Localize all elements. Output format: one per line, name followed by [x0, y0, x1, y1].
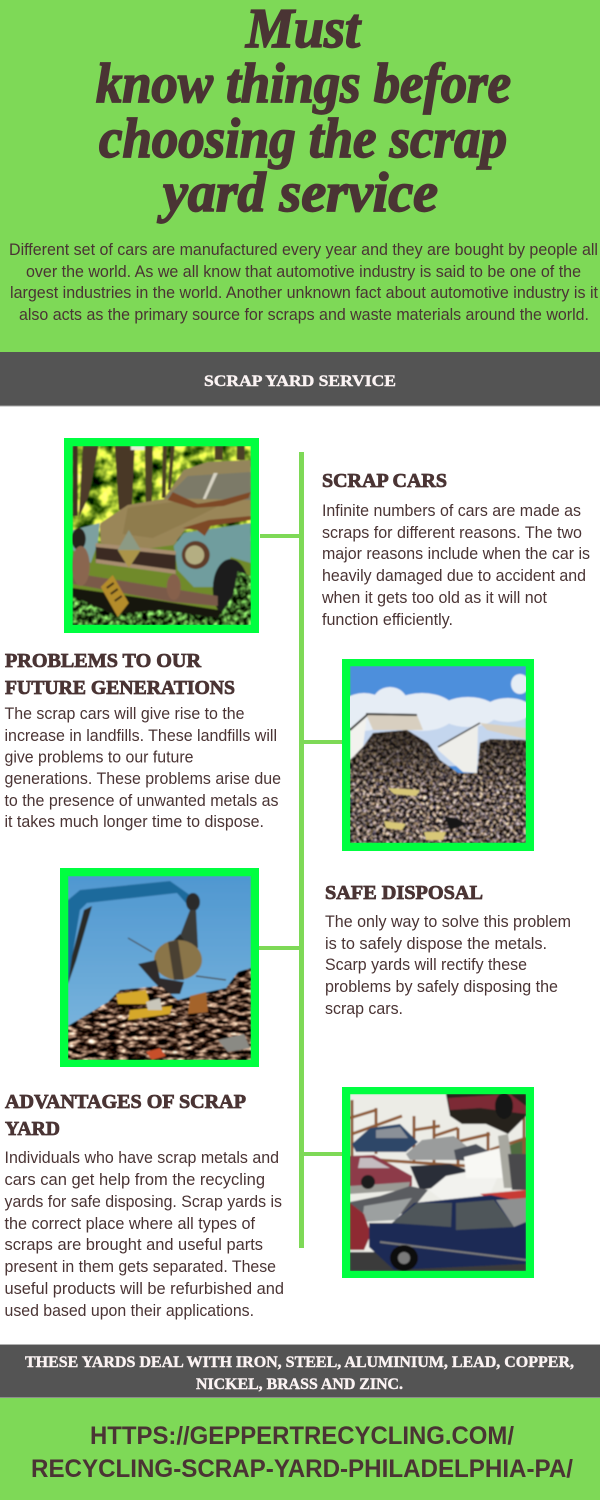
text: advantages: [4, 1149, 284, 1320]
heading: problems: PROBLEMS TO OUR: [5, 650, 201, 672]
footer: website url: HTTPS://GEPPERTRECYCLING.COM/: [90, 1422, 514, 1450]
text: problems: increase in landfills. These landfills will: [4, 727, 277, 745]
text: problems: to the presence of unwanted metals as: [4, 792, 278, 810]
text: problems: give problems to our future: [4, 748, 194, 766]
title: know things before: [96, 53, 511, 115]
timeline connector: [259, 452, 342, 1248]
intro paragraph: [9, 241, 598, 324]
text: advantages: useful products will be refurbished and: [4, 1280, 284, 1298]
text: scrap cars: heavily damaged due to accident and: [322, 567, 586, 585]
heading: safe disposal: SAFE DISPOSAL: [325, 882, 483, 904]
section banner: scrap yard service: [0, 352, 600, 406]
text: safe disposal: [325, 913, 571, 1018]
text: advantages: yards for safe disposing. Scrap yards is: [4, 1193, 282, 1211]
section: safe disposal: [325, 882, 571, 1018]
heading: problems: [5, 650, 235, 699]
intro paragraph: Different set of cars are manufactured every year and they are bought by people all: [9, 241, 598, 259]
intro paragraph: largest industries in the world. Another unknown fact about automotive industry is it: [10, 284, 598, 302]
section: advantages of scrap yard: [4, 1091, 284, 1320]
text: advantages: cars can get help from the recycling: [4, 1171, 265, 1189]
text: problems: it takes much longer time to dispose.: [4, 813, 264, 831]
banner: metals list: THESE YARDS DEAL WITH IRON, STEEL, ALUMINIUM, LEAD, COPPER,: [25, 1354, 574, 1371]
photo: landfill with dumping trailers: [338, 659, 534, 851]
text: safe disposal: scrap cars.: [325, 1000, 403, 1018]
section: problems to our future generations: [4, 650, 281, 831]
header panel: [0, 0, 600, 352]
section: scrap cars: [321, 470, 590, 629]
photo: crane grabbing scrap metal: [60, 868, 259, 1067]
intro paragraph: also acts as the primary source for scraps and waste materials around the world.: [19, 306, 589, 324]
title: [96, 0, 511, 224]
text: scrap cars: function efficiently.: [322, 611, 453, 629]
banner: metals list: [0, 1344, 600, 1398]
text: scrap cars: Infinite numbers of cars are made as: [322, 502, 581, 520]
intro paragraph: over the world. As we all know that automotive industry is said to be one of the: [26, 263, 581, 281]
text: advantages: present in them gets separated. These: [4, 1258, 276, 1276]
heading: advantages: [5, 1091, 246, 1140]
title: choosing the scrap: [99, 108, 507, 170]
title: yard service: [157, 162, 438, 224]
photo: stacked scrap cars on racks: [342, 1087, 534, 1278]
heading: problems: FUTURE GENERATIONS: [5, 677, 235, 699]
text: safe disposal: is to safely dispose the metals.: [325, 935, 547, 953]
text: problems: The scrap cars will give rise to the: [4, 705, 244, 723]
text: advantages: Individuals who have scrap metals and: [4, 1149, 279, 1167]
footer: website url: [0, 1398, 600, 1500]
text: scrap cars: scraps for different reasons. The two: [322, 524, 582, 542]
text: scrap cars: when it gets too old as it will not: [321, 589, 547, 607]
text: scrap cars: major reasons include when the car is: [322, 545, 590, 563]
text: problems: generations. These problems arise due: [4, 770, 281, 788]
photo: abandoned rusty car in forest: [64, 438, 259, 633]
text: scrap cars: [321, 502, 590, 629]
text: advantages: the correct place where all types of: [4, 1215, 255, 1233]
text: advantages: scraps are brought and useful parts: [4, 1236, 263, 1254]
text: advantages: used based upon their applications.: [4, 1302, 254, 1320]
text: safe disposal: The only way to solve this problem: [325, 913, 571, 931]
text: safe disposal: problems by safely disposing the: [325, 978, 558, 996]
section banner: scrap yard service: SCRAP YARD SERVICE: [204, 373, 396, 390]
heading: scrap cars: SCRAP CARS: [322, 470, 447, 492]
text: safe disposal: Scarp yards will rectify these: [325, 956, 527, 974]
footer: website url: RECYCLING-SCRAP-YARD-PHILADELPHIA-PA/: [31, 1455, 573, 1483]
heading: advantages: YARD: [5, 1118, 60, 1140]
heading: advantages: ADVANTAGES OF SCRAP: [5, 1091, 246, 1113]
banner: metals list: NICKEL, BRASS AND ZINC.: [196, 1376, 403, 1393]
text: problems: [4, 705, 281, 831]
